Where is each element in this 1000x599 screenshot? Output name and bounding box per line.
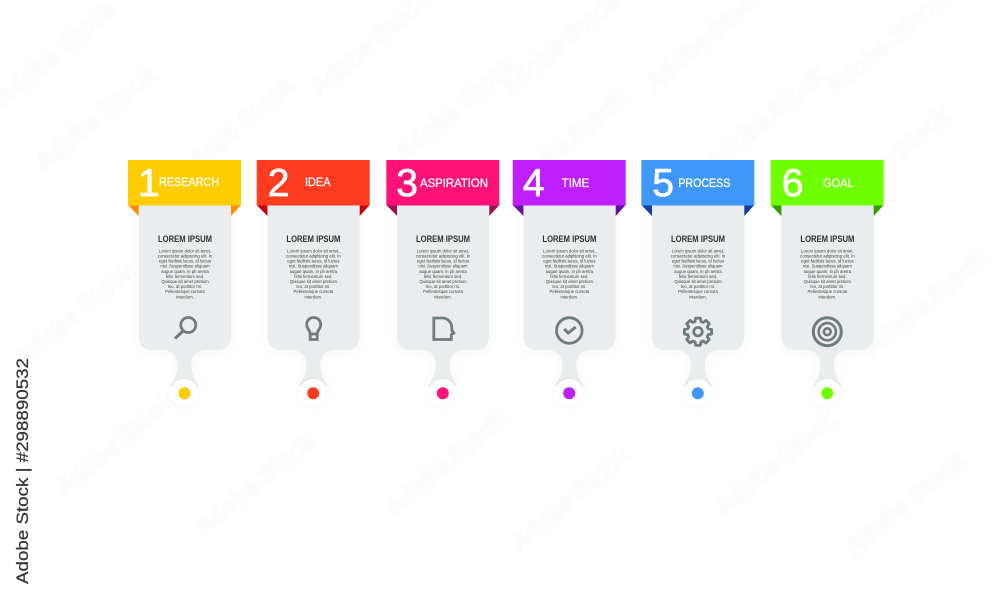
icon: clock — [556, 318, 582, 343]
body text: Pellentesque cursota — [294, 289, 334, 294]
body text: leo, at porttitor mi. — [810, 284, 844, 289]
left fold — [771, 205, 781, 216]
dot — [437, 387, 449, 399]
number: 6 — [782, 162, 803, 205]
panel — [781, 205, 874, 386]
card 1: research — [128, 160, 241, 407]
stock credit: Adobe Stock | #298890532 — [13, 358, 32, 584]
body text: consectetur adipiscing elit. In — [286, 254, 341, 258]
number: 1 — [138, 162, 160, 205]
body text: consectetur adipiscing elit. In — [542, 254, 597, 258]
body text: consectetur adipiscing elit. In — [416, 254, 471, 258]
body text: augue quam, in ph aretra — [290, 269, 338, 274]
watermark: Adobe Stock — [710, 406, 841, 522]
watermark: Adobe Stock — [390, 51, 521, 167]
dot — [178, 387, 190, 399]
card 3: aspiration — [386, 160, 499, 407]
icon: target — [813, 318, 841, 346]
body text: leo, at porttitor mi. — [168, 284, 202, 289]
body text: nisi. Suspendisse aliquam — [289, 264, 338, 269]
body text: Lorem ipsum dolor sit amet, — [287, 248, 340, 253]
label: PROCESS — [678, 176, 730, 190]
left fold — [386, 205, 397, 216]
connector node — [555, 379, 583, 407]
body text: eget facilisis lacus, id luctus — [159, 259, 211, 264]
body text: Quisque sit amet pretium — [161, 279, 209, 284]
heading: LOREM IPSUM — [286, 234, 340, 244]
watermark: Adobe Stock — [380, 406, 511, 522]
connector node — [299, 379, 327, 407]
right fold — [489, 205, 499, 216]
body text: interdum. — [305, 294, 322, 299]
icon: magnifier — [175, 318, 196, 338]
body text: nisi. Suspendisse aliquam — [803, 264, 852, 269]
body text: eget facilisis lacus, id luctus — [672, 259, 724, 264]
header — [257, 160, 370, 206]
body text: interdum. — [176, 294, 194, 299]
body text: nisi. Suspendisse aliquam — [673, 264, 723, 269]
body text: Pellentesque cursota — [678, 289, 718, 294]
panel — [652, 205, 744, 386]
heading: LOREM IPSUM — [671, 234, 725, 244]
body text: Lorem ipsum dolor sit amet, — [801, 248, 854, 253]
watermark: Adobe Stock — [505, 441, 636, 557]
body text: Pellentesque cursota — [808, 289, 848, 294]
watermark: Adobe Stock — [825, 101, 956, 217]
body text: Quisque sit amet pretium — [674, 279, 722, 284]
body text: leo, at porttitor mi. — [552, 284, 586, 289]
connector node — [684, 379, 712, 407]
label: GOAL — [823, 176, 854, 190]
body text: consectetur adipiscing elit. In — [671, 254, 726, 258]
card 4: time — [513, 160, 626, 407]
panel — [523, 205, 616, 386]
body text: leo, at porttitor mi. — [426, 284, 460, 289]
body text: Pellentesque cursota — [423, 289, 463, 294]
body text: Pellentesque cursota — [165, 289, 205, 294]
body text: felis fermentum sed. — [808, 274, 847, 279]
heading: LOREM IPSUM — [800, 234, 854, 244]
body text: leo, at porttitor mi. — [296, 284, 330, 289]
label: ASPIRATION — [420, 176, 488, 190]
number: 5 — [652, 162, 674, 205]
watermark: Adobe Stock — [700, 61, 831, 177]
left fold — [257, 205, 267, 216]
watermark: Adobe Stock — [30, 61, 161, 177]
body text: interdum. — [689, 294, 707, 299]
body text: leo, at porttitor mi. — [681, 284, 715, 289]
dot — [307, 387, 319, 399]
header — [386, 160, 499, 206]
body text: felis fermentum sed. — [679, 274, 717, 279]
heading: LOREM IPSUM — [542, 234, 596, 244]
body text: Quisque sit amet pretium — [804, 279, 851, 284]
body text: eget facilisis lacus, id luctus — [801, 259, 854, 264]
label: TIME — [562, 176, 589, 190]
body text: interdum. — [819, 294, 836, 299]
body text: consectetur adipiscing elit. In — [158, 254, 213, 258]
body text: augue quam, in ph aretra — [161, 269, 209, 274]
body text: Quisque sit amet pretium — [546, 279, 593, 284]
header — [128, 160, 241, 206]
panel — [267, 205, 360, 386]
body text: Lorem ipsum dolor sit amet, — [543, 248, 596, 253]
body text: Pellentesque cursota — [550, 289, 590, 294]
icon: gear — [684, 318, 712, 345]
body text: Quisque sit amet pretium — [290, 279, 337, 284]
left fold — [128, 205, 139, 216]
card 5: process — [641, 160, 754, 407]
dot — [821, 387, 833, 399]
panel — [397, 205, 489, 386]
connector node — [813, 379, 841, 407]
body text: Lorem ipsum dolor sit amet, — [672, 248, 724, 253]
body text: nisi. Suspendisse aliquam — [160, 264, 210, 269]
body text: felis fermentum sed. — [166, 274, 204, 279]
body text: eget facilisis lacus, id luctus — [543, 259, 596, 264]
watermark: Adobe Stock — [840, 446, 971, 562]
body text: consectetur adipiscing elit. In — [800, 254, 855, 258]
header — [641, 160, 754, 206]
body text: felis fermentum sed. — [424, 274, 462, 279]
body text: Lorem ipsum dolor sit amet, — [417, 248, 469, 253]
watermark: Adobe Stock — [190, 426, 321, 542]
icon: head — [434, 318, 454, 340]
number: 3 — [396, 162, 418, 205]
body text: interdum. — [561, 294, 578, 299]
body text: augue quam, in ph aretra — [546, 269, 594, 274]
watermark: Adobe Stock — [860, 246, 991, 362]
icon: light bulb — [307, 318, 321, 340]
heading: LOREM IPSUM — [416, 234, 470, 244]
label: RESEARCH — [159, 175, 219, 189]
connector node — [429, 379, 457, 407]
body text: augue quam, in ph aretra — [804, 269, 852, 274]
watermark: Adobe Stock — [10, 256, 141, 372]
panel — [139, 205, 231, 386]
label: IDEA — [305, 175, 331, 189]
body text: felis fermentum sed. — [294, 274, 333, 279]
header — [771, 160, 884, 206]
watermark: Adobe Stock — [50, 386, 181, 502]
watermark: Adobe Stock — [500, 86, 631, 202]
dot — [692, 387, 704, 399]
heading: LOREM IPSUM — [158, 234, 212, 244]
right fold — [231, 205, 241, 216]
watermark: Adobe Stock — [170, 71, 301, 187]
number: 4 — [523, 162, 544, 205]
body text: nisi. Suspendisse aliquam — [545, 264, 594, 269]
right fold — [744, 205, 754, 216]
dot — [563, 387, 575, 399]
card 6: goal — [771, 160, 884, 407]
right fold — [616, 205, 626, 216]
card 2: idea — [257, 160, 370, 407]
body text: Lorem ipsum dolor sit amet, — [159, 248, 211, 253]
right fold — [360, 205, 370, 216]
body text: eget facilisis lacus, id luctus — [287, 259, 340, 264]
body text: augue quam, in ph aretra — [419, 269, 467, 274]
body text: eget facilisis lacus, id luctus — [417, 259, 469, 264]
left fold — [641, 205, 652, 216]
left fold — [513, 205, 523, 216]
body text: nisi. Suspendisse aliquam — [418, 264, 468, 269]
body text: interdum. — [434, 294, 452, 299]
body text: augue quam, in ph aretra — [674, 269, 722, 274]
body text: Quisque sit amet pretium — [419, 279, 467, 284]
connector node — [170, 379, 198, 407]
header — [513, 160, 626, 206]
body text: felis fermentum sed. — [550, 274, 589, 279]
right fold — [874, 205, 884, 216]
number: 2 — [268, 162, 289, 205]
